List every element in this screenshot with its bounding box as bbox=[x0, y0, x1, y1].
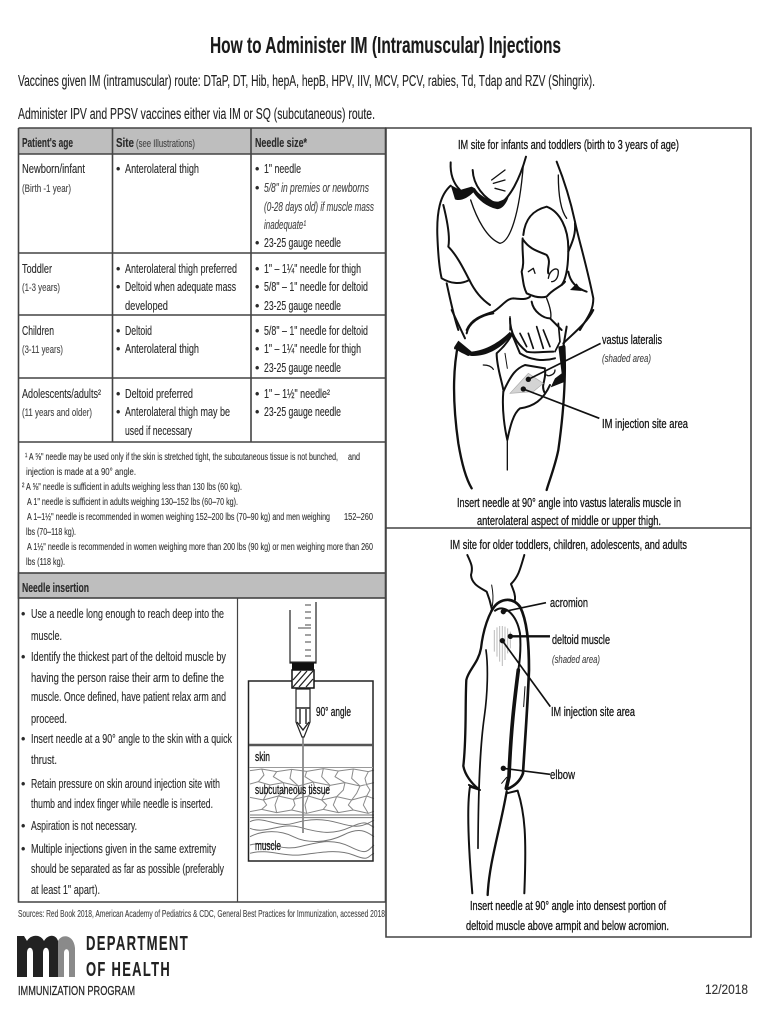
leader lines bbox=[502, 603, 550, 774]
row: newborn/infant: • bbox=[255, 236, 259, 250]
needle insertion instructions: Insert needle at a 90° angle to the skin with a quick bbox=[31, 732, 233, 746]
date: 12/2018 bbox=[705, 982, 748, 997]
row: newborn/infant: 5/8" in premies or newborns bbox=[264, 181, 369, 195]
row: adolescents/adults: 1" – 1½" needle² bbox=[264, 387, 330, 401]
row: adolescents/adults: Adolescents/adults² bbox=[22, 387, 101, 401]
row: children: 5/8" – 1" needle for deltoid bbox=[264, 324, 368, 338]
row: newborn/infant: • bbox=[255, 162, 259, 176]
label: elbow: elbow bbox=[550, 768, 576, 782]
footnotes bbox=[22, 452, 373, 568]
tissue layers bbox=[250, 769, 374, 858]
row: newborn/infant: • bbox=[255, 181, 259, 195]
heading: older site: IM site for older toddlers, children, adolescents, and adults bbox=[450, 538, 687, 552]
logo wordmark: DEPARTMENT bbox=[86, 933, 189, 955]
label: injection site: IM injection site area bbox=[602, 417, 688, 431]
upper body bbox=[437, 157, 593, 330]
label: skin: skin bbox=[255, 750, 270, 764]
caption: deltoid site bbox=[466, 899, 669, 933]
black shading at shoulders bbox=[451, 185, 509, 209]
sources: Sources: Red Book 2018, American Academy of Pediatrics & CDC, General Best Practices for Immunization, accessed 2018 bbox=[18, 908, 385, 920]
row: children: Deltoid bbox=[125, 324, 152, 338]
shaded deltoid area bbox=[494, 626, 510, 666]
row: children bbox=[22, 324, 368, 375]
label: injection site: IM injection site area bbox=[551, 705, 635, 719]
row: adolescents/adults bbox=[22, 387, 341, 438]
label: shaded area: (shaded area) bbox=[552, 654, 600, 666]
heading: infant site: IM site for infants and toddlers (birth to 3 years of age) bbox=[458, 138, 679, 152]
row: children: • bbox=[255, 342, 259, 356]
label: muscle: muscle bbox=[255, 839, 281, 853]
row: toddler: Toddler bbox=[22, 262, 52, 276]
row: adolescents/adults: • bbox=[255, 387, 259, 401]
footnotes: A 1–1½" needle is recommended in women weighing 152–200 lbs (70–90 kg) and men weighing bbox=[27, 512, 330, 523]
needle insertion instructions: Use a needle long enough to reach deep into the bbox=[31, 607, 224, 621]
needle insertion instructions: Multiple injections given in the same extremity bbox=[31, 842, 217, 856]
row: adolescents/adults: • bbox=[255, 405, 259, 419]
black shading at waist and hip bbox=[454, 332, 512, 356]
row: newborn/infant: Anterolateral thigh bbox=[125, 162, 199, 176]
logo mark bbox=[17, 936, 75, 977]
caption: deltoid site: deltoid muscle above armpit and below acromion. bbox=[466, 919, 669, 933]
syringe barrel bbox=[290, 602, 316, 663]
row: adolescents/adults: Anterolateral thigh may be bbox=[125, 405, 230, 419]
needle insertion instructions: Aspiration is not necessary. bbox=[31, 819, 137, 833]
footnotes: A 1½" needle is recommended in women weighing more than 200 lbs (90 kg) or men weighing more than 260 bbox=[27, 542, 373, 553]
row: toddler: • bbox=[116, 262, 120, 276]
heading: needle insertion: Needle insertion bbox=[22, 581, 89, 595]
row: toddler: • bbox=[116, 280, 120, 294]
heading: needle insertion bbox=[18, 573, 386, 598]
row: children: 1" – 1¼" needle for thigh bbox=[264, 342, 361, 356]
needle insertion instructions: • bbox=[21, 819, 25, 833]
footnotes: and bbox=[348, 452, 360, 463]
row: newborn/infant: (Birth -1 year) bbox=[22, 183, 71, 195]
label: 90 degree angle: 90° angle bbox=[316, 705, 351, 719]
row: toddler: 1" – 1¼" needle for thigh bbox=[264, 262, 361, 276]
row: toddler: developed bbox=[125, 299, 168, 313]
row: adolescents/adults: used if necessary bbox=[125, 424, 193, 438]
caption: deltoid site: Insert needle at 90° angle into densest portion of bbox=[470, 899, 666, 913]
table header: site: (see Illustrations) bbox=[136, 138, 195, 150]
table header: needle size: Needle size* bbox=[255, 136, 307, 150]
row: toddler: • bbox=[255, 299, 259, 313]
row: children: (3-11 years) bbox=[22, 344, 63, 356]
row: adolescents/adults: • bbox=[116, 405, 120, 419]
needle insertion instructions: Identify the thickest part of the deltoid muscle by bbox=[31, 650, 227, 664]
needle insertion instructions: at least 1" apart). bbox=[31, 883, 100, 897]
program name: IMMUNIZATION PROGRAM bbox=[18, 983, 135, 998]
row: toddler: • bbox=[255, 280, 259, 294]
footnotes: injection is made at a 90° angle. bbox=[26, 467, 136, 478]
illustration: upper arm bbox=[463, 555, 550, 895]
row: newborn/infant bbox=[22, 162, 374, 250]
row: children: • bbox=[116, 324, 120, 338]
row: children: Children bbox=[22, 324, 54, 338]
panel: illustrations frame bbox=[386, 128, 751, 937]
panel: infant and toddler site bbox=[437, 138, 688, 528]
footnotes: lbs (70–118 kg). bbox=[26, 527, 76, 538]
needle insertion instructions: • bbox=[21, 777, 25, 791]
row: newborn/infant: 1" needle bbox=[264, 162, 301, 176]
skin layer bbox=[249, 744, 373, 746]
intro text: IPV and PPSV: Administer IPV and PPSV vaccines either via IM or SQ (subcutaneous) route. bbox=[18, 106, 375, 123]
footnotes: lbs (118 kg). bbox=[26, 557, 65, 568]
row: newborn/infant: Newborn/infant bbox=[22, 162, 85, 176]
syringe hub bbox=[292, 663, 314, 670]
row: adolescents/adults: • bbox=[116, 387, 120, 401]
title: How to Administer IM (Intramuscular) Injections bbox=[210, 32, 561, 58]
caption: infant site bbox=[457, 496, 681, 528]
needle hub bbox=[296, 689, 310, 737]
caption: infant site: anterolateral aspect of middle or upper thigh. bbox=[477, 514, 661, 528]
label: shaded area: (shaded area) bbox=[602, 353, 651, 365]
logo: Minnesota Department of Health bbox=[17, 933, 189, 981]
table header: patient's age: Patient's age bbox=[22, 136, 73, 150]
footnotes: ¹ A ⅝" needle may be used only if the skin is stretched tight, the subcutaneous tissue is not bunched, bbox=[25, 452, 338, 463]
caption: infant site: Insert needle at 90° angle into vastus lateralis muscle in bbox=[457, 496, 681, 510]
footnotes: A 1" needle is sufficient in adults weighing 130–152 lbs (60–70 kg). bbox=[27, 497, 238, 508]
row: children: • bbox=[255, 324, 259, 338]
needle insertion instructions: proceed. bbox=[31, 712, 67, 726]
logo wordmark: OF HEALTH bbox=[86, 959, 171, 981]
needle insertion instructions: thrust. bbox=[31, 753, 57, 767]
label: subcutaneous tissue: subcutaneous tissue bbox=[255, 783, 330, 797]
needle insertion instructions: • bbox=[21, 842, 25, 856]
needle insertion instructions: muscle. Once defined, have patient relax arm and bbox=[31, 690, 226, 704]
row: newborn/infant: • bbox=[116, 162, 120, 176]
needle shaft bbox=[302, 735, 304, 833]
row: children: 23-25 gauge needle bbox=[264, 361, 341, 375]
needle insertion instructions bbox=[21, 607, 233, 897]
logo wordmark bbox=[86, 933, 189, 981]
table header: site: Site bbox=[116, 136, 134, 150]
row: toddler: • bbox=[255, 262, 259, 276]
row: newborn/infant: 23-25 gauge needle bbox=[264, 236, 341, 250]
row: toddler: Anterolateral thigh preferred bbox=[125, 262, 237, 276]
row: children: • bbox=[255, 361, 259, 375]
row: children: Anterolateral thigh bbox=[125, 342, 199, 356]
row: toddler: Deltoid when adequate mass bbox=[125, 280, 236, 294]
needle insertion instructions: Retain pressure on skin around injection site with bbox=[31, 777, 220, 791]
footnotes: 152–260 bbox=[344, 512, 373, 523]
leader lines bbox=[523, 343, 601, 418]
needle insertion instructions: should be separated as far as possible (preferably bbox=[31, 862, 225, 876]
row: toddler: 23-25 gauge needle bbox=[264, 299, 341, 313]
footnotes: ² A ⅝" needle is sufficient in adults weighing less than 130 lbs (60 kg). bbox=[22, 482, 242, 493]
row: adolescents/adults: Deltoid preferred bbox=[125, 387, 193, 401]
needle insertion instructions: thumb and index finger while needle is inserted. bbox=[31, 797, 213, 811]
row: children: • bbox=[116, 342, 120, 356]
panel: dosing table bbox=[18, 128, 386, 902]
row: newborn/infant: (0-28 days old) if muscle mass bbox=[264, 200, 374, 214]
shaded injection area bbox=[510, 373, 543, 393]
row: adolescents/adults: 23-25 gauge needle bbox=[264, 405, 341, 419]
needle insertion instructions: having the person raise their arm to define the bbox=[31, 671, 224, 685]
lower body bbox=[452, 310, 601, 490]
needle insertion instructions: • bbox=[21, 650, 25, 664]
label: vastus lateralis: vastus lateralis bbox=[602, 333, 662, 347]
illustration: adult holding infant bbox=[437, 157, 601, 490]
table header: site bbox=[116, 136, 195, 150]
needle insertion instructions: • bbox=[21, 607, 25, 621]
label: deltoid muscle: deltoid muscle bbox=[552, 633, 610, 647]
tissue box bbox=[248, 681, 373, 861]
row: newborn/infant: inadequate¹ bbox=[264, 218, 306, 232]
needle insertion instructions: • bbox=[21, 732, 25, 746]
row: toddler bbox=[22, 262, 368, 313]
panel: older children and adult site bbox=[450, 538, 687, 933]
needle insertion instructions: muscle. bbox=[31, 629, 62, 643]
row: toddler: 5/8" – 1" needle for deltoid bbox=[264, 280, 368, 294]
diagram: syringe and needle through tissue layers bbox=[248, 602, 374, 861]
row: toddler: (1-3 years) bbox=[22, 282, 60, 294]
row: adolescents/adults: (11 years and older) bbox=[22, 407, 92, 419]
label: acromion: acromion bbox=[550, 596, 588, 610]
